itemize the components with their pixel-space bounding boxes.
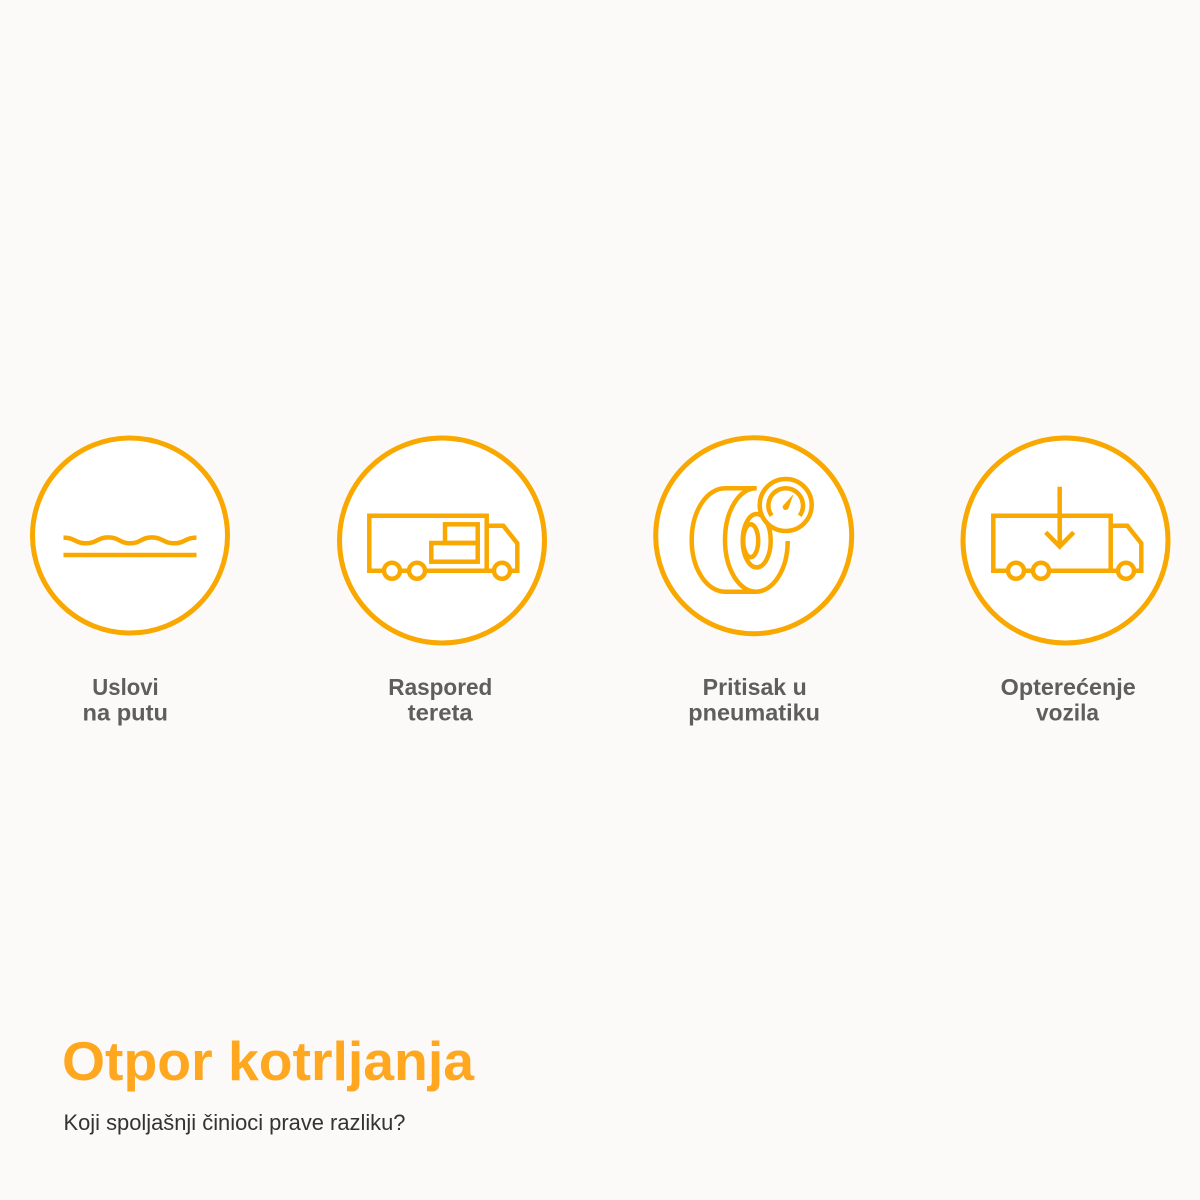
label: road conditions: Uslovi xyxy=(92,674,159,700)
panel: load distribution xyxy=(340,438,544,726)
label: load distribution: Raspored xyxy=(388,674,492,700)
label: tyre pressure: pneumatiku xyxy=(688,700,820,726)
label: tyre pressure: Pritisak u xyxy=(703,674,807,700)
icon: tyre with pressure gauge in circle xyxy=(656,438,852,634)
label: load distribution: tereta xyxy=(408,700,473,726)
label: road conditions: na putu xyxy=(82,700,168,726)
title: Otpor kotrljanja xyxy=(62,1030,474,1092)
label: road conditions xyxy=(82,674,168,726)
label: vehicle load: Opterećenje xyxy=(1001,674,1136,700)
panel: tyre pressure xyxy=(656,438,852,726)
label: vehicle load: vozila xyxy=(1036,700,1099,726)
panel: vehicle load xyxy=(963,438,1168,726)
icon: truck with downward arrow in circle xyxy=(963,438,1168,643)
label: tyre pressure xyxy=(688,674,820,726)
icon: road surface waves in circle xyxy=(32,438,228,633)
icon: truck with cargo boxes in circle xyxy=(340,438,544,643)
label: load distribution xyxy=(388,674,492,726)
label: vehicle load xyxy=(1001,674,1136,726)
subtitle: Koji spoljašnji činioci prave razliku? xyxy=(64,1110,406,1135)
panel: road conditions xyxy=(32,438,228,726)
